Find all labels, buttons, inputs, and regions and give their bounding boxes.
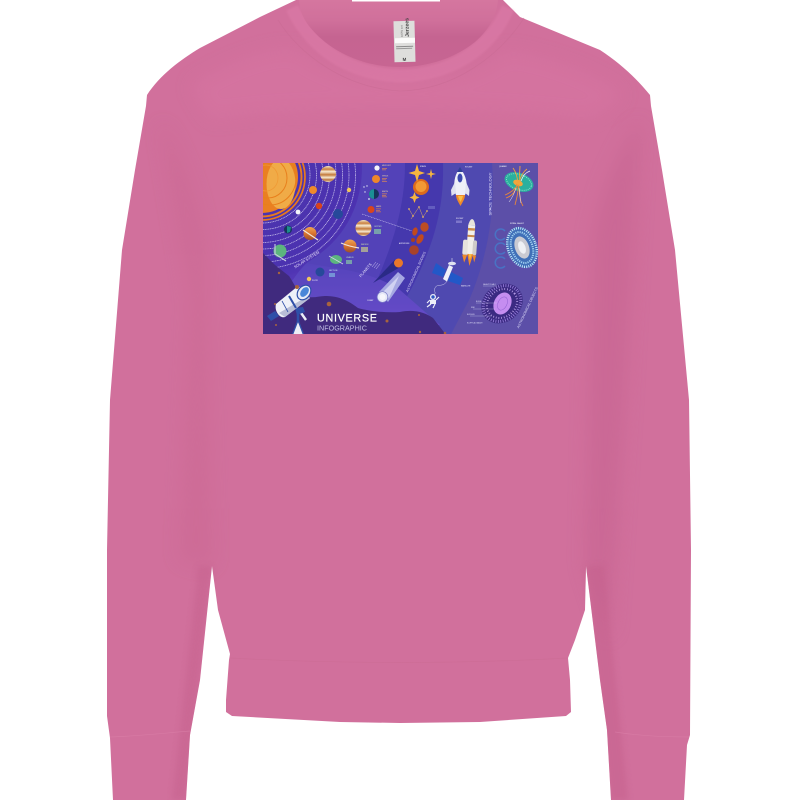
solar system planets — [274, 166, 351, 261]
jupiter — [320, 166, 336, 182]
heading: astronomical objects: ASTRONOMICAL OBJECTS — [516, 286, 539, 329]
tube — [276, 286, 310, 317]
title: universe infographic — [317, 312, 377, 332]
neck label: Jerzees — [404, 18, 411, 37]
neck label — [393, 18, 416, 62]
icon: sun — [263, 163, 306, 221]
uranus — [274, 244, 286, 261]
mercury — [296, 210, 300, 214]
neck label: M — [403, 57, 407, 62]
mars — [316, 203, 322, 209]
pluto — [347, 188, 351, 192]
icon: orange comet — [373, 258, 403, 283]
fabric shading — [186, 172, 624, 797]
saturn — [303, 227, 318, 240]
planet data labels: MERCURY — [382, 165, 392, 167]
icon: asteroids — [399, 222, 429, 255]
footer stars — [274, 272, 446, 334]
icon: quasar: QUASAR — [499, 165, 507, 168]
icon: astronaut — [427, 281, 447, 308]
planet data labels — [312, 165, 392, 282]
icon: elliptical galaxy: BULGE — [476, 301, 481, 303]
collar stitching — [278, 18, 524, 91]
icon: planets grid — [372, 262, 380, 269]
icon: progress rings — [495, 229, 505, 268]
planet data labels: PLUTO — [312, 280, 319, 282]
sleeve cuff ribbing lines — [110, 731, 190, 737]
eyepiece — [267, 311, 279, 321]
icon: launch rocket — [461, 219, 479, 266]
venus — [309, 186, 317, 194]
mount arm — [299, 310, 306, 320]
tripod — [292, 310, 304, 336]
rocket caption — [456, 218, 464, 223]
inside of neck — [299, 0, 498, 67]
lens — [294, 283, 314, 302]
venus — [372, 175, 380, 183]
sweatshirt — [107, 0, 691, 800]
planet data labels: SATURN — [361, 243, 369, 246]
icon: satellite: SATELLITE — [461, 284, 471, 288]
icon: white comet — [367, 272, 405, 302]
icon: space shuttle rocket — [451, 166, 473, 206]
icon: space shuttle rocket: ROCKET — [465, 166, 473, 168]
wave glow — [292, 274, 440, 325]
icon: star with orange planet: STARS — [420, 165, 427, 168]
icon: spiral galaxy: SPIRAL GALAXY — [510, 222, 525, 225]
icon: elliptical galaxy: GALACTIC HALO — [483, 283, 497, 286]
planet data labels: EARTH — [382, 190, 389, 193]
moons — [363, 185, 370, 200]
panel: astronomical objects band — [451, 163, 538, 334]
mars — [368, 206, 374, 213]
planet data labels: VENUS — [382, 176, 389, 178]
panel: astronomical bodies band — [379, 163, 443, 296]
rocket caption: ROCKET — [456, 218, 464, 220]
sweatshirt body silhouette — [107, 0, 691, 800]
icon: elliptical galaxy: ELLIPTICAL GALAXY — [467, 322, 484, 324]
heading: planets: PLANETS — [359, 262, 373, 278]
icon: quasar — [499, 165, 536, 206]
title: universe infographic: UNIVERSE — [317, 312, 377, 324]
neck label: 100% cot — [400, 25, 404, 37]
jupiter — [356, 220, 372, 236]
saturn — [341, 240, 359, 252]
icon: telescope — [267, 283, 314, 336]
dotted connector line — [362, 214, 412, 231]
heading: astronomical bodies: ASTRONOMICAL BODIES — [405, 250, 427, 293]
waist hem line — [230, 658, 568, 662]
neptune — [316, 268, 324, 276]
icon: spiral galaxy — [501, 222, 543, 272]
uranus — [329, 255, 343, 264]
orbit rings — [263, 163, 356, 268]
icon: satellite — [432, 258, 471, 288]
panel: solar system band — [263, 163, 362, 290]
icon: elliptical galaxy: NUCLEUS — [467, 314, 475, 316]
neptune — [333, 209, 343, 219]
panel: planets band — [307, 163, 405, 278]
white gap at neck top — [352, 0, 440, 2]
icon: constellation — [408, 206, 435, 219]
icon: elliptical galaxy: DISK — [471, 307, 476, 309]
icon: asteroids: ASTEROIDS — [399, 242, 410, 245]
heading: solar system: SOLAR SYSTEM — [293, 251, 320, 269]
title: universe infographic: INFOGRAPHIC — [317, 323, 367, 332]
planet data labels: JUPITER — [374, 226, 382, 228]
earth — [284, 226, 292, 234]
icon: elliptical galaxy — [467, 275, 531, 332]
heading: space technology: SPACE TECHNOLOGY — [488, 172, 492, 216]
planets column — [307, 165, 380, 281]
collar rib highlight — [292, 8, 508, 76]
planet data labels: MARS — [376, 205, 382, 208]
panel: space technology band — [408, 163, 493, 334]
planet data labels: NEPTUNE — [329, 270, 338, 272]
mercury — [374, 165, 380, 171]
dark wave footer — [263, 253, 447, 336]
icon: star with orange planet — [408, 164, 436, 203]
earth — [369, 189, 379, 199]
pluto — [307, 277, 311, 281]
print: universe infographic — [263, 163, 538, 334]
planet data labels: URANUS — [346, 256, 354, 259]
icon: white comet: COMET — [367, 300, 374, 302]
